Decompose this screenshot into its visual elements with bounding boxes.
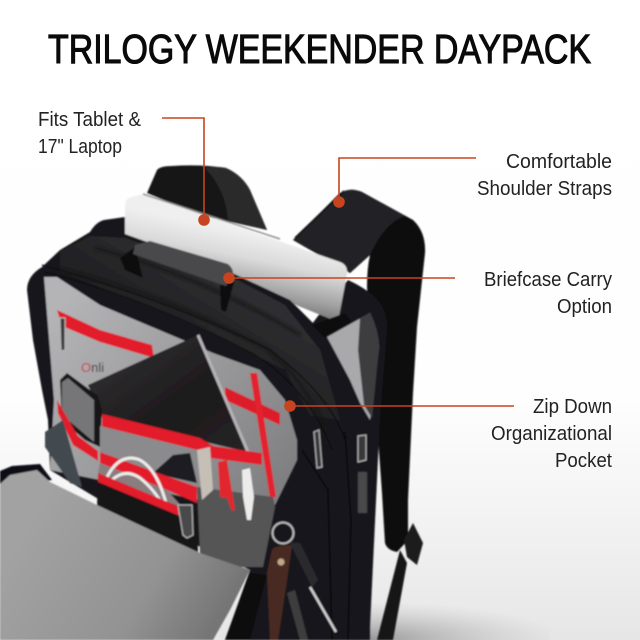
callout: organizational pocket: Pocket — [555, 450, 612, 472]
callout: briefcase carry: Briefcase Carry — [484, 269, 612, 291]
rear compartment — [300, 280, 387, 640]
upper red zip right — [225, 387, 280, 425]
brand text: Onli — [81, 360, 104, 375]
callout: shoulder straps — [333, 151, 612, 208]
silver pen — [197, 447, 213, 500]
open flap — [0, 464, 250, 640]
callout: fits tablet and laptop: Fits Tablet & — [38, 109, 142, 131]
callout: shoulder straps: Shoulder Straps — [477, 178, 612, 200]
left red band — [57, 400, 98, 461]
front zipper — [225, 573, 267, 640]
notebook — [88, 335, 248, 452]
rear shoulder strap behind laptop — [147, 165, 267, 230]
white pen — [242, 468, 254, 520]
callout: fits tablet and laptop — [38, 109, 210, 226]
keys — [267, 522, 336, 640]
upper red zip left — [57, 310, 154, 358]
black pocket — [97, 473, 198, 553]
front compartment body — [27, 217, 356, 640]
organizer gray panel — [44, 277, 297, 505]
pocket zip pull — [178, 505, 193, 538]
callout: briefcase carry — [223, 269, 612, 318]
backpack photo — [0, 165, 425, 640]
red lip — [98, 473, 182, 517]
mesh pocket — [98, 463, 183, 508]
floor shadow — [250, 585, 550, 640]
gray zip tag — [358, 472, 367, 513]
power bank — [45, 420, 82, 487]
laptop — [125, 194, 347, 322]
white cable — [107, 458, 167, 507]
phone — [60, 373, 102, 447]
charger — [153, 453, 197, 483]
pen pocket — [197, 487, 275, 567]
callout: fits tablet and laptop: 17" Laptop — [38, 136, 122, 158]
lower red zip — [100, 452, 197, 503]
callout: organizational pocket — [284, 396, 612, 472]
mid red band — [102, 414, 262, 465]
callout: briefcase carry: Option — [557, 296, 612, 318]
red pen — [218, 460, 235, 511]
callout: organizational pocket: Organizational — [491, 423, 612, 445]
vertical red strap — [250, 373, 276, 498]
briefcase handle — [120, 241, 234, 312]
callout: shoulder straps: Comfortable — [506, 151, 612, 173]
silver zippers — [60, 318, 366, 468]
callout: organizational pocket: Zip Down — [533, 396, 612, 418]
right shoulder strap — [293, 190, 425, 640]
gray inner pocket — [100, 426, 197, 487]
